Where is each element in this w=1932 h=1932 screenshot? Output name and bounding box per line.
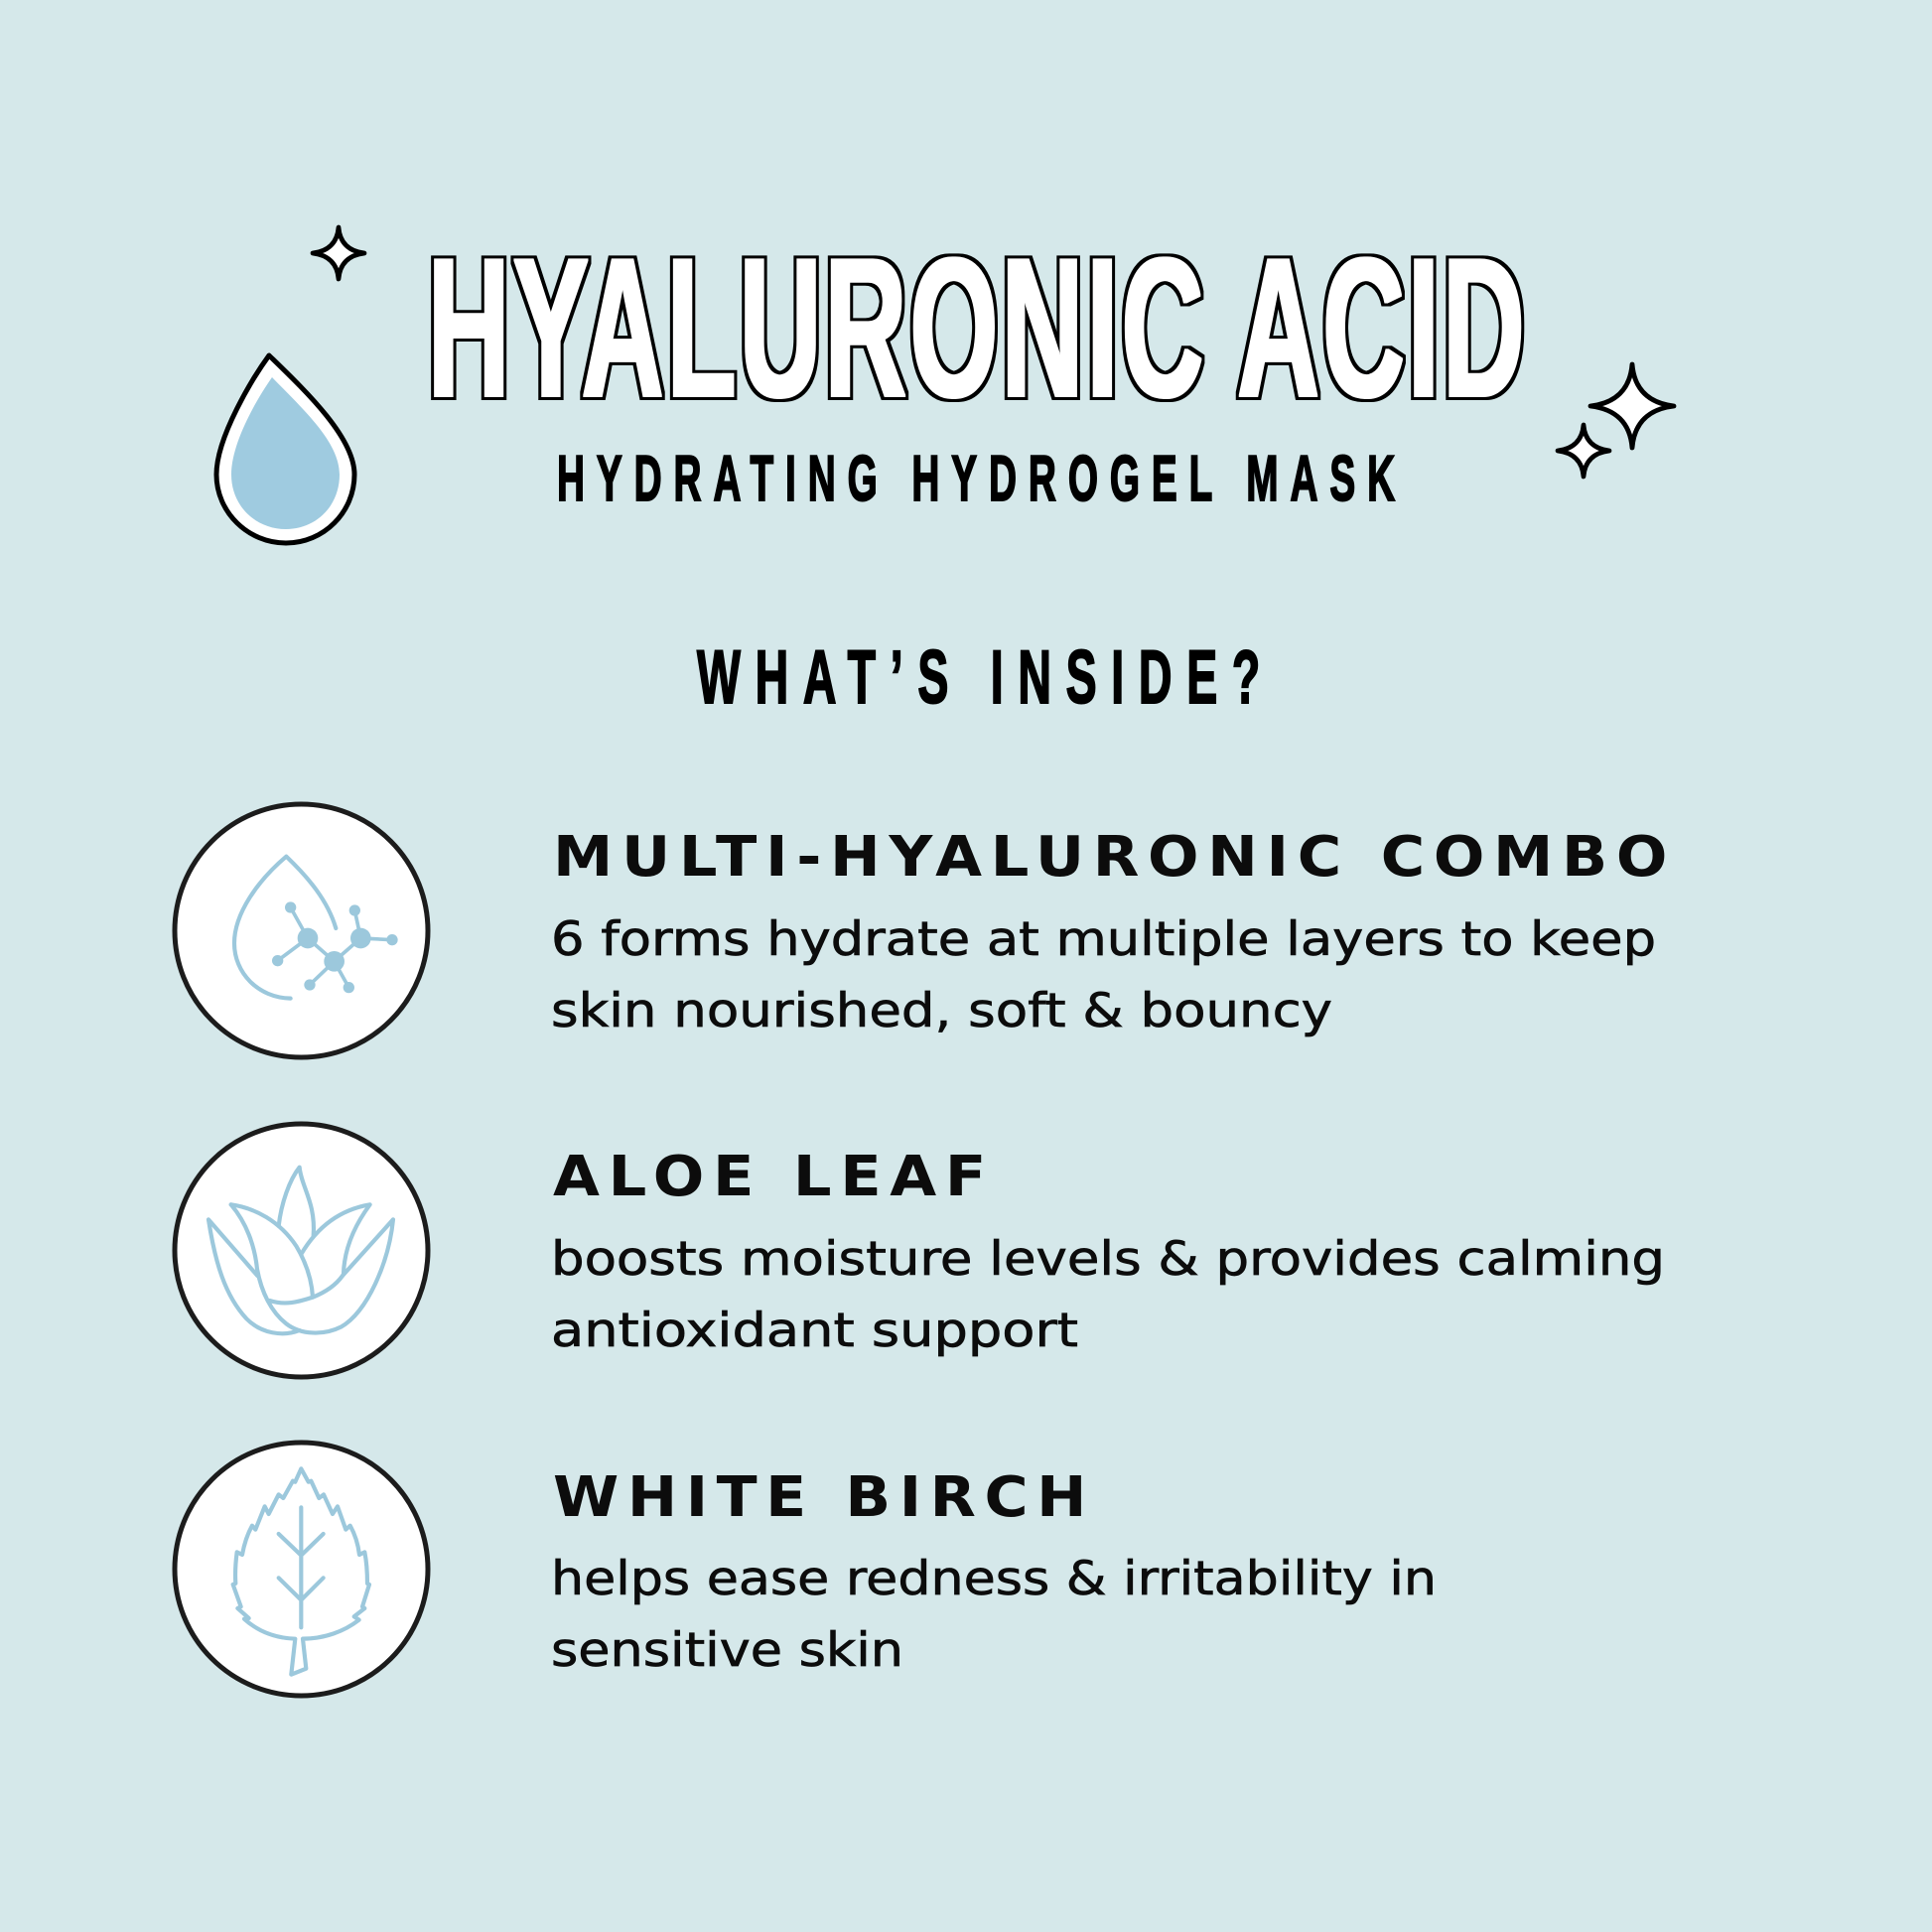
ingredient description: sensitive skin <box>551 1623 903 1678</box>
heading: what's inside: WHAT’S INSIDE? <box>697 635 1275 720</box>
ingredient description: antioxidant support <box>551 1304 1078 1358</box>
panel: white birch <box>175 1443 1437 1696</box>
ingredient description: helps ease redness & irritability in <box>551 1552 1437 1606</box>
ingredient description: 6 forms hydrate at multiple layers to keep <box>551 912 1656 967</box>
ingredient name: WHITE BIRCH <box>553 1465 1095 1530</box>
ingredient description: boosts moisture levels & provides calming <box>551 1232 1665 1287</box>
icon: sparkle large right <box>1590 364 1674 448</box>
ingredient description: skin nourished, soft & bouncy <box>551 984 1332 1038</box>
ingredient name: ALOE LEAF <box>553 1145 995 1209</box>
panel: multi-hyaluronic combo <box>175 804 1676 1057</box>
icon: water drop <box>216 355 354 543</box>
panel: aloe leaf <box>175 1124 1665 1377</box>
icon: sparkle top left <box>313 227 364 279</box>
icon: drop with molecule <box>175 804 428 1057</box>
icon: sparkle small right <box>1558 425 1609 477</box>
ingredient name: MULTI-HYALURONIC COMBO <box>553 825 1676 890</box>
icon: birch leaf <box>175 1443 428 1696</box>
icon: aloe plant <box>175 1124 428 1377</box>
